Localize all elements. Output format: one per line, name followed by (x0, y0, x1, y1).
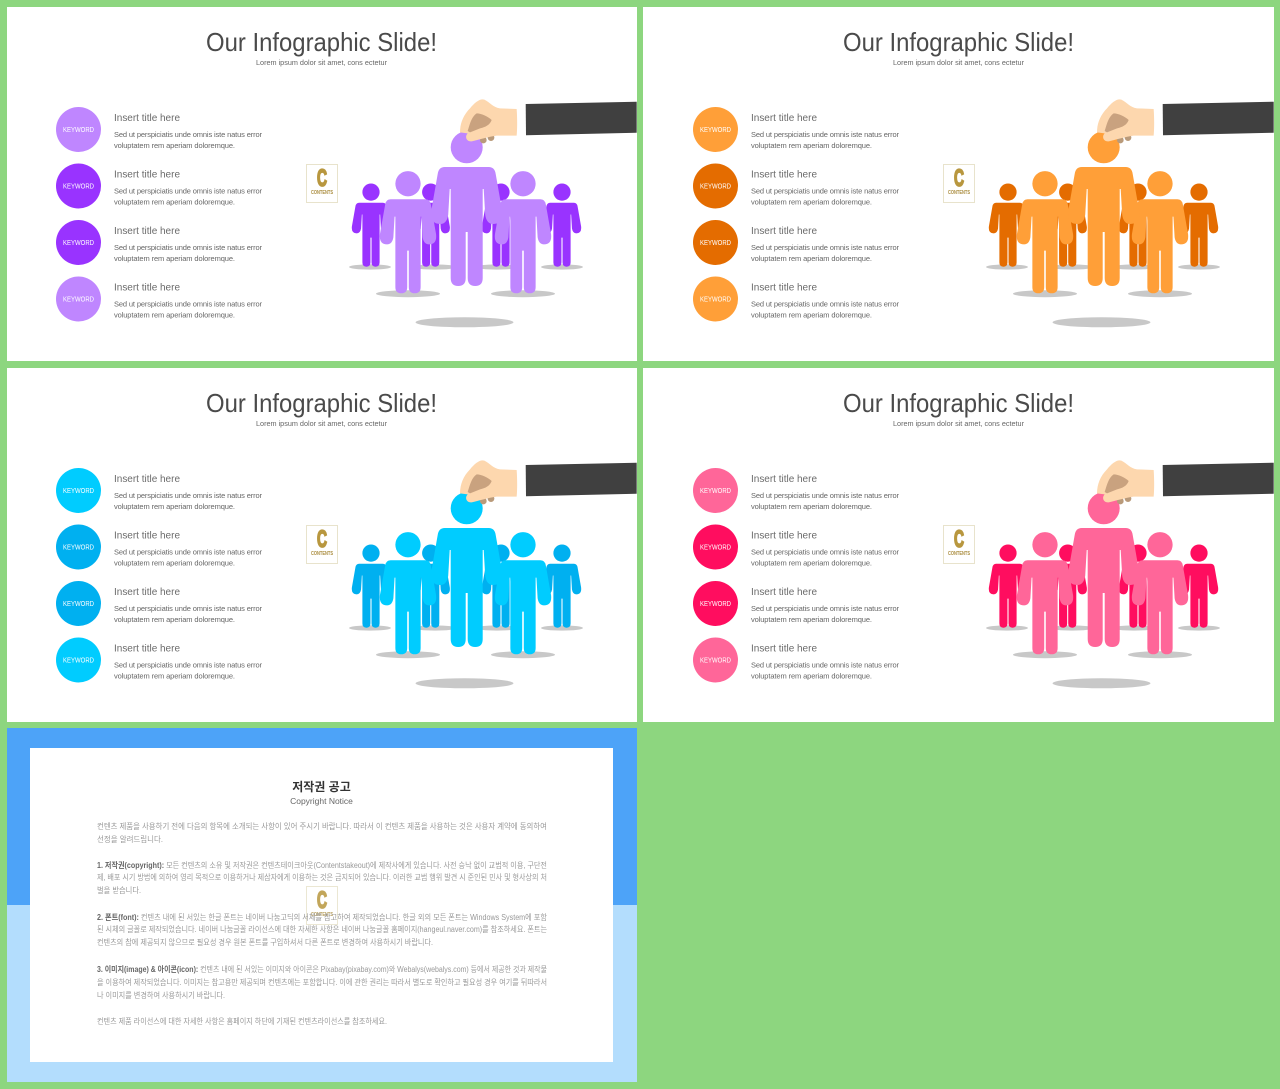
notice footer line: 컨텐츠 제품 라이선스에 대한 자세한 사항은 홈페이지 하단에 기재된 컨텐츠라이선스를 참조하세요. (97, 1016, 387, 1026)
panel: copyright notice (7, 728, 637, 1082)
list item 4: voluptatem rem aperiam doloremque. (751, 672, 872, 680)
list item 3: Insert title here (751, 226, 817, 237)
list item 3 (56, 581, 262, 626)
list item 3 (693, 220, 900, 265)
list item 1 (56, 468, 262, 513)
list item 1: KEYWORD (63, 488, 94, 495)
list item 2: voluptatem rem aperiam doloremque. (751, 198, 872, 206)
list item 3: Insert title here (751, 587, 817, 598)
panel: pink slide (643, 368, 1274, 722)
list item 2: Insert title here (751, 530, 817, 542)
list item 2: KEYWORD (63, 544, 94, 552)
logo: C (954, 165, 964, 192)
list item 3: voluptatem rem aperiam doloremque. (751, 254, 872, 263)
list item 4: Sed ut perspiciatis unde omnis iste natus error (751, 660, 900, 670)
notice section 3: image and icon: 을 이용하여 제작되었습니다. 이미지는 참고용만 제공되며 컨텐츠에는 포함합니다. 이에 관한 권리는 따라서 별도로 확인하고 필요성 경우 여기를 뒤따라서 (97, 977, 547, 987)
list item 1: KEYWORD (700, 127, 731, 134)
notice intro (97, 821, 547, 844)
list item 1: voluptatem rem aperiam doloremque. (114, 141, 235, 150)
list item 4: voluptatem rem aperiam doloremque. (114, 310, 235, 320)
logo watermark: CONTENTS (311, 912, 334, 918)
logo: C (954, 526, 964, 553)
list item 1: voluptatem rem aperiam doloremque. (751, 141, 872, 150)
list item 4: Insert title here (751, 644, 817, 654)
subtitle: Lorem ipsum dolor sit amet, cons ectetur (893, 421, 1025, 428)
list item 4: KEYWORD (700, 658, 731, 664)
subtitle: Lorem ipsum dolor sit amet, cons ectetur (256, 60, 388, 67)
list item 4: KEYWORD (700, 296, 731, 304)
list item 2: Insert title here (114, 530, 180, 542)
list item 2 (56, 164, 262, 208)
list item 1: Insert title here (114, 113, 180, 124)
subtitle: Lorem ipsum dolor sit amet, cons ectetur (893, 60, 1025, 67)
list item 3: Insert title here (114, 226, 180, 237)
list item 3: voluptatem rem aperiam doloremque. (114, 615, 235, 624)
list item 3: KEYWORD (63, 240, 94, 247)
list item 3: KEYWORD (63, 601, 94, 608)
title: Our Infographic Slide! (206, 27, 437, 57)
list item 4: voluptatem rem aperiam doloremque. (751, 310, 872, 320)
list item 2: KEYWORD (700, 544, 731, 552)
list item 4 (693, 276, 900, 322)
logo: C (317, 526, 327, 553)
list item 3: KEYWORD (700, 240, 731, 247)
list item 4: KEYWORD (63, 658, 94, 664)
logo (944, 526, 974, 564)
notice section 2: font: 2. 폰트(font): 컨텐츠 내에 된 서있는 한글 폰트는 네이버 나눔고딕의 서체를 참고하여 제작되었습니다. 한글 외의 모든 폰트는 Windows System에 포함 (97, 912, 548, 922)
list item 2 (56, 524, 262, 570)
illustration: people and hand (349, 99, 637, 327)
list item 1: Sed ut perspiciatis unde omnis iste natus error (114, 491, 262, 500)
notice section 3: image and icon: 나 이미지를 변경하여 사용하시기 바랍니다. (97, 990, 225, 1000)
list item 1: KEYWORD (700, 488, 731, 495)
illustration: people and hand (349, 460, 637, 688)
list item 4: Sed ut perspiciatis unde omnis iste natus error (114, 300, 262, 308)
notice section 3: image and icon (97, 964, 547, 1000)
list item 1 (56, 107, 262, 152)
list item 4: Insert title here (751, 282, 817, 294)
list item 1: KEYWORD (63, 127, 94, 134)
logo: CONTENTS (948, 551, 971, 557)
notice subheading: Copyright Notice (290, 796, 353, 806)
list item 1: Sed ut perspiciatis unde omnis iste natus error (114, 130, 262, 139)
list item 2: KEYWORD (63, 184, 94, 190)
logo watermark (306, 886, 338, 924)
notice intro: 선정을 알려드립니다. (97, 834, 163, 844)
notice section 2: font: 된 시체의 글꼴로 제작되었습니다. 네이버 나눔글꼴 라이선스에 대한 자세한 사항은 네이버 나눔글꼴 홈페이지(hangeul.naver.com)를 참조하세요. 폰트는 (97, 924, 547, 934)
logo: CONTENTS (948, 190, 971, 196)
list item 2: KEYWORD (700, 184, 731, 190)
panel: cyan slide (7, 368, 637, 722)
list item 2: voluptatem rem aperiam doloremque. (751, 558, 872, 568)
list item 1: Insert title here (751, 113, 817, 124)
list item 2: voluptatem rem aperiam doloremque. (114, 558, 235, 568)
logo (306, 526, 338, 564)
list item 1: Insert title here (751, 474, 817, 485)
list item 4 (693, 638, 900, 682)
title: Our Infographic Slide! (206, 388, 437, 418)
list item 3: voluptatem rem aperiam doloremque. (751, 615, 872, 624)
list item 4: KEYWORD (63, 296, 94, 304)
list item 2: Insert title here (114, 170, 180, 180)
subtitle: Lorem ipsum dolor sit amet, cons ectetur (256, 421, 388, 428)
list item 3: KEYWORD (700, 601, 731, 608)
logo: CONTENTS (311, 551, 334, 557)
notice section 1: copyright: 벌을 받습니다. (97, 885, 141, 895)
list item 4: voluptatem rem aperiam doloremque. (114, 672, 235, 680)
notice section 1: copyright: 1. 저작권(copyright): 모든 컨텐츠의 소유 및 저작권은 컨텐츠테이크아웃(Contentstakeout)에 제작사에게 있습니다. 사전 승낙 없이 교범적 이용, 구단전 (97, 860, 547, 870)
notice section 2: font (97, 912, 548, 947)
list item 2: voluptatem rem aperiam doloremque. (114, 198, 235, 206)
list item 4 (56, 276, 262, 322)
list item 4: Sed ut perspiciatis unde omnis iste natus error (114, 660, 262, 670)
list item 2: Sed ut perspiciatis unde omnis iste natus error (114, 548, 262, 556)
list item 4: Insert title here (114, 644, 180, 654)
list item 1 (693, 107, 900, 152)
notice intro: 컨텐츠 제품을 사용하기 전에 다음의 항목에 소개되는 사항이 있어 주시기 바랍니다. 따라서 이 컨텐츠 제품을 사용하는 것은 사용자 계약에 동의하여 (97, 821, 547, 831)
list item 2: Sed ut perspiciatis unde omnis iste natus error (751, 548, 900, 556)
notice section 1: copyright: 제, 배포 시기 방법에 의하여 영리 목적으로 이용하거나 제삼자에게 이용하는 것은 금지되어 있습니다. 이러한 교범 행위 발견 시 준인된 민사 및 형사상의 처 (97, 872, 547, 882)
list item 3 (56, 220, 262, 265)
title: Our Infographic Slide! (843, 27, 1074, 57)
panel: orange slide (643, 7, 1274, 361)
list item 3: Sed ut perspiciatis unde omnis iste natus error (751, 604, 900, 613)
notice section 3: image and icon: 3. 이미지(image) & 아이콘(icon): 컨텐츠 내에 된 서있는 이미지와 아이콘은 Pixabay(pixabay.com)와 Webalys(webalys.com) 등에서 제공한 것과 제작물 (97, 964, 547, 974)
list item 2 (693, 164, 900, 208)
list item 3 (693, 581, 900, 626)
logo (944, 164, 974, 202)
illustration: people and hand (986, 99, 1274, 327)
panel: purple slide (7, 7, 637, 361)
list item 3: Sed ut perspiciatis unde omnis iste natus error (114, 604, 262, 613)
list item 1: voluptatem rem aperiam doloremque. (114, 502, 235, 511)
list item 2: Sed ut perspiciatis unde omnis iste natus error (751, 186, 900, 196)
list item 1 (693, 468, 900, 513)
list item 3: voluptatem rem aperiam doloremque. (114, 254, 235, 263)
logo: CONTENTS (311, 190, 334, 196)
list item 2 (693, 524, 900, 570)
list item 1: Sed ut perspiciatis unde omnis iste natus error (751, 491, 900, 500)
list item 4 (56, 638, 262, 682)
list item 1: voluptatem rem aperiam doloremque. (751, 502, 872, 511)
list item 3: Sed ut perspiciatis unde omnis iste natus error (751, 243, 900, 252)
list item 1: Insert title here (114, 474, 180, 485)
list item 2: Sed ut perspiciatis unde omnis iste natus error (114, 186, 262, 196)
logo: C (317, 165, 327, 192)
notice section 1: copyright (97, 860, 547, 895)
list item 4: Insert title here (114, 282, 180, 294)
list item 4: Sed ut perspiciatis unde omnis iste natus error (751, 300, 900, 308)
list item 1: Sed ut perspiciatis unde omnis iste natus error (751, 130, 900, 139)
list item 3: Sed ut perspiciatis unde omnis iste natus error (114, 243, 262, 252)
list item 3: Insert title here (114, 587, 180, 598)
logo (306, 164, 338, 202)
illustration: people and hand (986, 460, 1274, 688)
notice heading: 저작권 공고 (292, 779, 351, 794)
logo watermark: C (317, 887, 327, 914)
list item 2: Insert title here (751, 170, 817, 180)
title: Our Infographic Slide! (843, 388, 1074, 418)
notice section 2: font: 컨텐츠의 참에 제공되지 않으므로 필요성 경우 원본 폰트를 구입하셔서 다른 폰트로 변경하여 사용하시기 바랍니다. (97, 937, 433, 947)
